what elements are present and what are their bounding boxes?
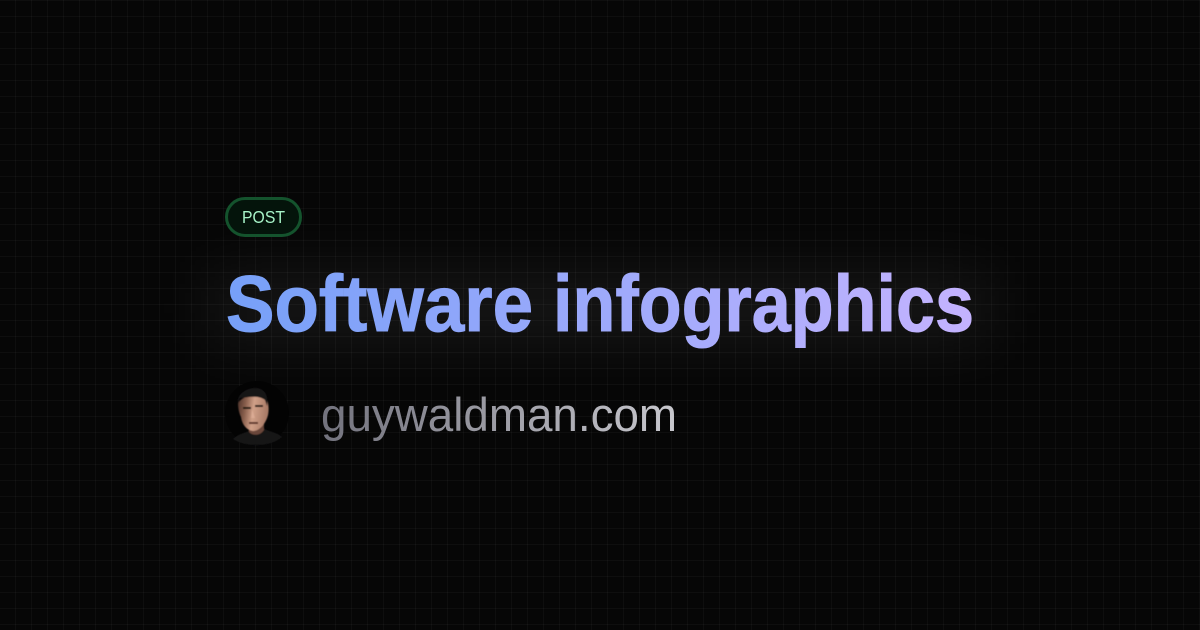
title: infographics	[553, 259, 974, 348]
title	[226, 259, 974, 348]
site url: guywaldman.com	[321, 388, 677, 441]
badge: POST: POST	[242, 207, 285, 227]
icon: author avatar	[226, 381, 288, 444]
badge: POST	[225, 197, 302, 237]
title: Software	[226, 259, 533, 348]
